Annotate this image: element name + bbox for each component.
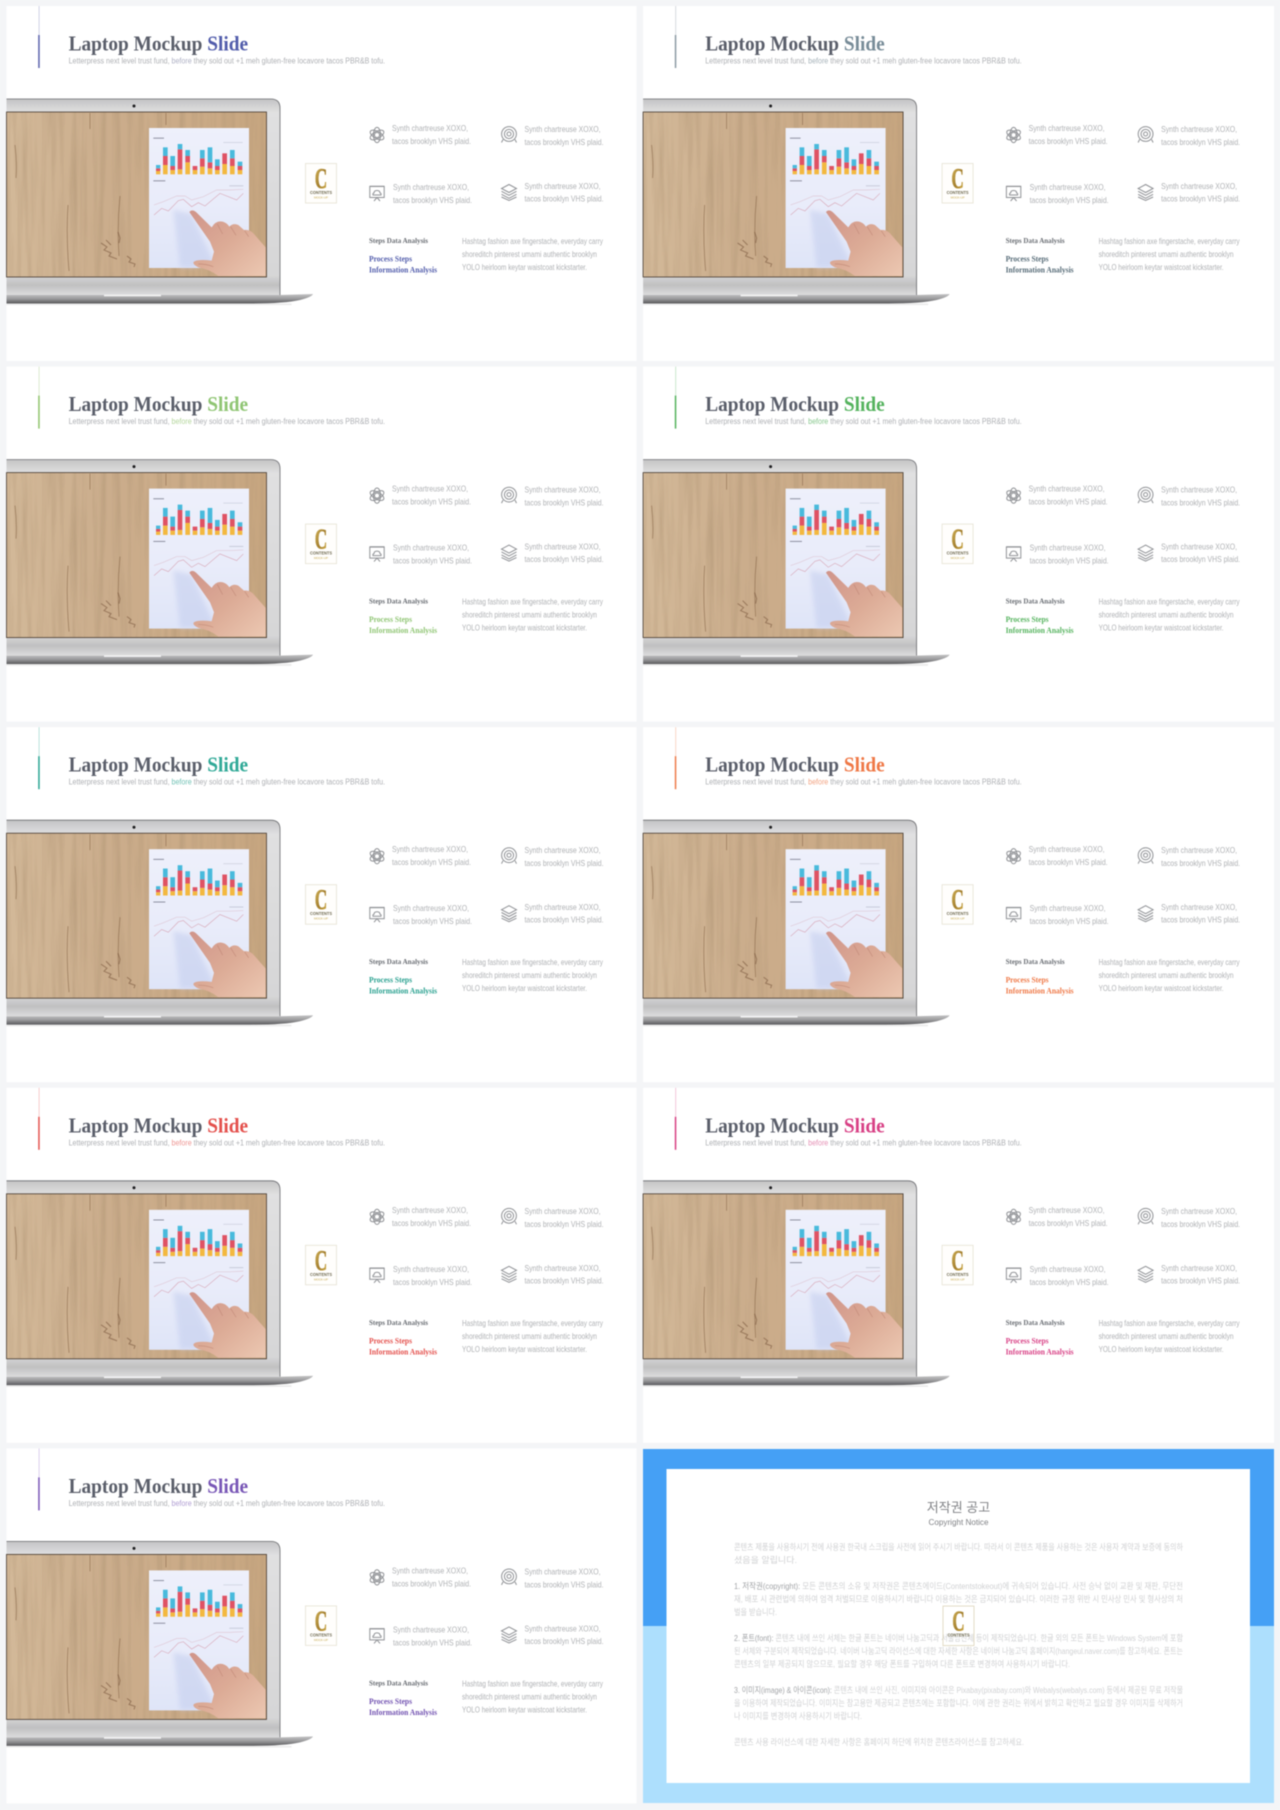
feature text 3: tacos brooklyn VHS plaid. <box>393 1277 472 1287</box>
feature text 1 <box>392 123 471 146</box>
feature text 2: Synth chartreuse XOXO, <box>1161 1206 1237 1216</box>
laptop mockup <box>6 1181 313 1387</box>
logo badge <box>306 885 336 924</box>
logo badge <box>306 164 336 203</box>
feature text 4 <box>524 181 604 204</box>
feature text 1 <box>1029 123 1108 146</box>
feature text 4: Synth chartreuse XOXO, <box>1161 1263 1237 1273</box>
feature text 2 <box>1161 124 1240 147</box>
feature text 1: Synth chartreuse XOXO, <box>392 1565 468 1575</box>
description text <box>462 1678 604 1714</box>
icon: presentation <box>370 1629 384 1643</box>
icon: target <box>1138 848 1153 864</box>
feature text 3: Synth chartreuse XOXO, <box>1030 1264 1106 1274</box>
description text: YOLO heirloom keytar waistcoat kickstarter. <box>462 983 587 993</box>
logo badge <box>942 524 973 564</box>
analysis labels: Steps Data Analysis <box>369 1678 428 1687</box>
description text: shoreditch pinterest umami authentic brooklyn <box>462 249 597 259</box>
feature text 2: tacos brooklyn VHS plaid. <box>1161 498 1240 508</box>
panel: copyright notice <box>643 1449 1274 1803</box>
feature text 2 <box>1161 485 1240 508</box>
feature text 1: Synth chartreuse XOXO, <box>1029 123 1105 133</box>
panel: slide 8 pink <box>643 1088 1274 1443</box>
feature text 2: tacos brooklyn VHS plaid. <box>1161 137 1240 147</box>
feature text 2 <box>1161 1206 1240 1229</box>
analysis labels <box>1006 236 1074 274</box>
icon: presentation <box>370 547 384 562</box>
description text: Hashtag fashion axe fingerstache, everyday carry <box>1099 957 1240 967</box>
accent line <box>38 1448 40 1510</box>
analysis labels: Information Analysis <box>369 987 437 996</box>
analysis labels: Information Analysis <box>369 1347 437 1356</box>
feature text 2: Synth chartreuse XOXO, <box>524 485 600 495</box>
panel: slide 6 orange <box>643 727 1274 1082</box>
icon: target <box>502 1569 516 1585</box>
description text: YOLO heirloom keytar waistcoat kickstarter. <box>462 623 587 633</box>
icon: atom <box>369 1570 385 1585</box>
notice subtitle: Copyright Notice <box>928 1517 989 1527</box>
feature text 4: tacos brooklyn VHS plaid. <box>1161 554 1240 564</box>
notice white card <box>666 1469 1250 1783</box>
notice title: 저작권 공고 <box>927 1500 990 1515</box>
panel: slide 5 teal <box>6 727 636 1082</box>
feature text 2: tacos brooklyn VHS plaid. <box>524 1219 604 1229</box>
feature text 1: Synth chartreuse XOXO, <box>1029 484 1105 494</box>
icon: presentation <box>370 1268 384 1283</box>
feature text 3: Synth chartreuse XOXO, <box>393 903 469 913</box>
panel: slide 4 green <box>643 367 1274 722</box>
analysis labels: Information Analysis <box>369 266 437 274</box>
feature text 3: tacos brooklyn VHS plaid. <box>393 1637 472 1647</box>
description text: YOLO heirloom keytar waistcoat kickstarter. <box>1099 1344 1224 1354</box>
feature text 1: tacos brooklyn VHS plaid. <box>1029 857 1108 867</box>
description text <box>1099 236 1240 272</box>
analysis labels: Process Steps <box>1006 1336 1049 1345</box>
analysis labels: Steps Data Analysis <box>369 1318 428 1327</box>
icon: layers <box>502 1627 516 1643</box>
description text: shoreditch pinterest umami authentic brooklyn <box>462 970 597 980</box>
description text <box>462 597 604 633</box>
feature text 3: tacos brooklyn VHS plaid. <box>393 195 472 205</box>
feature text 1 <box>392 484 471 507</box>
feature text 2: tacos brooklyn VHS plaid. <box>524 498 604 508</box>
analysis labels: Steps Data Analysis <box>1006 236 1065 245</box>
feature text 4: Synth chartreuse XOXO, <box>524 1263 600 1273</box>
feature text 3 <box>393 182 472 205</box>
description text: YOLO heirloom keytar waistcoat kickstarter. <box>462 262 587 272</box>
feature text 2: Synth chartreuse XOXO, <box>1161 845 1237 855</box>
analysis labels: Process Steps <box>369 976 412 985</box>
analysis labels <box>1006 1318 1074 1356</box>
notice footer line: 콘텐츠 사용 라이선스에 대한 자세한 사항은 홈페이지 하단에 위치한 콘텐츠라이선스를 참고하세요. <box>734 1736 1024 1747</box>
analysis labels <box>369 597 437 635</box>
feature text 1: Synth chartreuse XOXO, <box>1029 844 1105 854</box>
feature text 1 <box>392 1565 471 1588</box>
feature text 3 <box>1030 1264 1109 1287</box>
feature text 3 <box>393 1264 472 1287</box>
notice section 3: 3. 이미지(image) & 아이콘(icon): 콘텐츠 내에 쓰인 사진, 이미지와 아이콘은 Pixabay(pixabay.com)와 Webalys(webalys.com) 등에서 제공된 무료 저작물 <box>734 1684 1183 1695</box>
feature text 3 <box>393 543 472 566</box>
feature text 4 <box>524 542 604 564</box>
feature text 3 <box>1030 903 1109 926</box>
feature text 4: tacos brooklyn VHS plaid. <box>524 194 604 204</box>
feature text 3: tacos brooklyn VHS plaid. <box>1030 556 1109 566</box>
feature text 4 <box>1161 1263 1240 1285</box>
notice section 1: 재, 배포 시 관련법에 의하여 엄격 처벌되므로 이용하시기 바랍니다 이용하는 것은 금지되어 있습니다. 이러한 규정 위반 시 민사상 민사 및 형사상의 처 <box>734 1593 1183 1604</box>
feature text 2: tacos brooklyn VHS plaid. <box>524 1579 604 1589</box>
title: Laptop Mockup Slide <box>69 392 248 416</box>
feature text 3 <box>393 1624 472 1647</box>
feature text 3 <box>1030 182 1109 205</box>
logo badge <box>942 1245 973 1285</box>
feature text 3 <box>1030 543 1109 566</box>
logo badge <box>306 524 336 564</box>
icon: presentation <box>1006 186 1021 201</box>
notice section 2: 2. 폰트(font): 콘텐츠 내에 쓰인 서체는 한글 폰트는 네이버 나눔고딕과 서울남산체 등이 제작되었습니다. 한글 외의 모든 폰트는 Windows System에 포함 <box>734 1632 1183 1643</box>
title: Laptop Mockup Slide <box>705 1113 885 1137</box>
icon: layers <box>1138 184 1153 200</box>
feature text 1: Synth chartreuse XOXO, <box>392 1205 468 1215</box>
description text: shoreditch pinterest umami authentic brooklyn <box>1099 970 1234 980</box>
description text: Hashtag fashion axe fingerstache, everyday carry <box>1099 1318 1240 1328</box>
feature text 3: Synth chartreuse XOXO, <box>1030 543 1106 553</box>
icon: atom <box>369 1209 385 1224</box>
subtitle: Letterpress next level trust fund, before they sold out +1 meh gluten-free locavore tacos PBR&B tofu. <box>69 778 385 787</box>
feature text 4: tacos brooklyn VHS plaid. <box>1161 1275 1240 1285</box>
feature text 2 <box>524 845 604 868</box>
description text <box>462 236 604 272</box>
description text: shoreditch pinterest umami authentic brooklyn <box>462 1691 597 1701</box>
feature text 1: Synth chartreuse XOXO, <box>392 844 468 854</box>
analysis labels <box>1006 957 1074 996</box>
feature text 3: tacos brooklyn VHS plaid. <box>393 916 472 926</box>
accent line <box>38 727 40 789</box>
logo badge overlay: C <box>952 1607 965 1638</box>
feature text 2: Synth chartreuse XOXO, <box>524 845 600 855</box>
logo badge <box>306 1606 336 1645</box>
notice background blue <box>643 1449 1274 1803</box>
description text: shoreditch pinterest umami authentic brooklyn <box>462 610 597 620</box>
subtitle: Letterpress next level trust fund, before they sold out +1 meh gluten-free locavore tacos PBR&B tofu. <box>705 1138 1022 1147</box>
analysis labels: Steps Data Analysis <box>1006 957 1065 966</box>
feature text 2: tacos brooklyn VHS plaid. <box>524 137 604 147</box>
description text <box>1099 1318 1240 1354</box>
description text: YOLO heirloom keytar waistcoat kickstarter. <box>1099 623 1224 633</box>
icon: layers <box>1138 1266 1153 1282</box>
icon: presentation <box>1006 907 1021 922</box>
accent line <box>675 1088 676 1150</box>
subtitle: Letterpress next level trust fund, before they sold out +1 meh gluten-free locavore tacos PBR&B tofu. <box>705 417 1022 426</box>
feature text 2: tacos brooklyn VHS plaid. <box>524 858 604 868</box>
analysis labels <box>369 1318 437 1356</box>
icon: atom <box>369 849 385 864</box>
logo badge overlay <box>943 1606 974 1646</box>
feature text 3: Synth chartreuse XOXO, <box>393 1264 469 1274</box>
subtitle: Letterpress next level trust fund, before they sold out +1 meh gluten-free locavore tacos PBR&B tofu. <box>705 778 1022 787</box>
feature text 1: tacos brooklyn VHS plaid. <box>1029 136 1108 146</box>
notice intro: 콘텐츠 제품을 사용하시기 전에 사용권 한국내 스크립을 사전에 읽어 주시기 바랍니다. 따라서 이 콘텐츠 제품을 사용하는 것은 사용자 계약과 보증에 동의하 <box>734 1541 1183 1552</box>
notice section 3 <box>734 1684 1183 1721</box>
feature text 2: Synth chartreuse XOXO, <box>524 1566 600 1576</box>
icon: target <box>502 487 516 503</box>
feature text 4 <box>1161 181 1240 204</box>
analysis labels: Process Steps <box>1006 254 1049 264</box>
feature text 3: tacos brooklyn VHS plaid. <box>1030 195 1109 205</box>
feature text 4: Synth chartreuse XOXO, <box>1161 181 1237 191</box>
analysis labels: Process Steps <box>369 615 412 624</box>
notice section 1: 벌을 받습니다. <box>734 1607 777 1617</box>
notice section 3: 나 이미지를 변경하여 사용하시기 바랍니다. <box>734 1710 862 1721</box>
analysis labels: Process Steps <box>369 1697 412 1706</box>
subtitle: Letterpress next level trust fund, before they sold out +1 meh gluten-free locavore tacos PBR&B tofu. <box>69 1499 385 1508</box>
notice section 2 <box>734 1632 1183 1669</box>
description text: YOLO heirloom keytar waistcoat kickstarter. <box>1099 983 1224 993</box>
subtitle: Letterpress next level trust fund, before they sold out +1 meh gluten-free locavore tacos PBR&B tofu. <box>69 417 385 426</box>
icon: layers <box>502 1266 516 1282</box>
description text: shoreditch pinterest umami authentic brooklyn <box>462 1331 597 1341</box>
analysis labels <box>369 236 437 274</box>
logo badge <box>942 885 973 924</box>
feature text 2: Synth chartreuse XOXO, <box>524 1206 600 1216</box>
description text: YOLO heirloom keytar waistcoat kickstarter. <box>462 1704 587 1714</box>
laptop mockup <box>643 99 950 305</box>
subtitle: Letterpress next level trust fund, before they sold out +1 meh gluten-free locavore tacos PBR&B tofu. <box>69 1138 385 1147</box>
panel: slide 3 light green <box>6 367 636 722</box>
title: Laptop Mockup Slide <box>69 32 248 56</box>
feature text 2: tacos brooklyn VHS plaid. <box>1161 1219 1240 1229</box>
notice section 1 <box>734 1580 1183 1617</box>
feature text 3: tacos brooklyn VHS plaid. <box>393 556 472 566</box>
analysis labels: Information Analysis <box>1006 987 1074 996</box>
analysis labels: Steps Data Analysis <box>1006 597 1065 606</box>
feature text 3: tacos brooklyn VHS plaid. <box>1030 916 1109 926</box>
icon: target <box>502 848 516 864</box>
feature text 4 <box>1161 902 1240 925</box>
laptop mockup <box>643 460 950 666</box>
analysis labels: Process Steps <box>369 254 412 264</box>
title: Laptop Mockup Slide <box>705 753 885 777</box>
laptop mockup <box>6 820 313 1026</box>
feature text 4: Synth chartreuse XOXO, <box>524 181 600 191</box>
feature text 1 <box>1029 844 1108 867</box>
icon: atom <box>1005 488 1022 503</box>
description text: Hashtag fashion axe fingerstache, everyday carry <box>462 1318 604 1328</box>
description text: Hashtag fashion axe fingerstache, everyday carry <box>462 597 604 607</box>
icon: layers <box>502 184 516 200</box>
feature text 4: tacos brooklyn VHS plaid. <box>524 1275 604 1285</box>
feature text 1: Synth chartreuse XOXO, <box>392 123 468 133</box>
icon: layers <box>502 545 516 561</box>
feature text 2: Synth chartreuse XOXO, <box>1161 124 1237 134</box>
description text <box>462 1318 604 1354</box>
feature text 2: Synth chartreuse XOXO, <box>524 124 600 134</box>
accent line <box>38 367 40 429</box>
feature text 4 <box>524 1623 604 1646</box>
title: Laptop Mockup Slide <box>69 753 248 777</box>
feature text 4: Synth chartreuse XOXO, <box>1161 542 1237 552</box>
subtitle: Letterpress next level trust fund, before they sold out +1 meh gluten-free locavore tacos PBR&B tofu. <box>705 56 1022 66</box>
feature text 1: tacos brooklyn VHS plaid. <box>392 857 471 867</box>
feature text 4: Synth chartreuse XOXO, <box>524 902 600 912</box>
analysis labels: Steps Data Analysis <box>369 957 428 966</box>
feature text 4: Synth chartreuse XOXO, <box>1161 902 1237 912</box>
laptop mockup <box>6 1541 313 1748</box>
feature text 3: Synth chartreuse XOXO, <box>393 543 469 553</box>
logo badge overlay: CONTENTS <box>948 1633 970 1638</box>
notice section 2: 된 서체와 구분되어 제작되었습니다. 네이버 나눔고딕 라이선스에 대한 자세한 사항은 네이버 나눔고딕 홈페이지(hangeul.naver.com)를 참고하세요. 폰트는 <box>734 1645 1183 1656</box>
feature text 2 <box>1161 845 1240 868</box>
analysis labels: Process Steps <box>1006 976 1049 985</box>
panel: slide 1 indigo <box>6 6 636 361</box>
analysis labels: Process Steps <box>1006 615 1049 624</box>
feature text 3: Synth chartreuse XOXO, <box>393 1624 469 1634</box>
feature text 1: tacos brooklyn VHS plaid. <box>1029 1218 1108 1228</box>
icon: target <box>1138 487 1153 503</box>
analysis labels: Information Analysis <box>1006 266 1074 274</box>
subtitle: Letterpress next level trust fund, before they sold out +1 meh gluten-free locavore tacos PBR&B tofu. <box>69 56 385 66</box>
accent line <box>675 367 676 429</box>
icon: presentation <box>1006 547 1021 562</box>
feature text 2: Synth chartreuse XOXO, <box>1161 485 1237 495</box>
icon: atom <box>1005 127 1022 143</box>
feature text 4: tacos brooklyn VHS plaid. <box>1161 194 1240 204</box>
feature text 4: tacos brooklyn VHS plaid. <box>1161 915 1240 925</box>
analysis labels: Information Analysis <box>369 1708 437 1717</box>
feature text 1 <box>1029 1205 1108 1228</box>
description text: Hashtag fashion axe fingerstache, everyday carry <box>462 1678 604 1688</box>
icon: layers <box>1138 906 1153 922</box>
icon: presentation <box>370 907 384 922</box>
laptop mockup <box>6 460 313 666</box>
icon: target <box>502 1208 516 1224</box>
accent line <box>38 6 40 68</box>
laptop mockup <box>643 820 950 1026</box>
analysis labels: Steps Data Analysis <box>1006 1318 1065 1327</box>
feature text 1: tacos brooklyn VHS plaid. <box>392 136 471 146</box>
feature text 4 <box>524 1263 604 1285</box>
description text <box>1099 597 1240 633</box>
feature text 1: tacos brooklyn VHS plaid. <box>392 497 471 507</box>
description text: Hashtag fashion axe fingerstache, everyday carry <box>462 236 604 246</box>
icon: presentation <box>1006 1268 1021 1283</box>
description text: YOLO heirloom keytar waistcoat kickstarter. <box>462 1344 587 1354</box>
description text: shoreditch pinterest umami authentic brooklyn <box>1099 1331 1234 1341</box>
analysis labels: Process Steps <box>369 1336 412 1345</box>
feature text 4 <box>524 902 604 925</box>
title: Laptop Mockup Slide <box>69 1113 248 1137</box>
feature text 4 <box>1161 542 1240 564</box>
feature text 2: tacos brooklyn VHS plaid. <box>1161 858 1240 868</box>
feature text 1 <box>392 1205 471 1228</box>
panel: slide 2 slate <box>643 6 1274 361</box>
laptop mockup <box>643 1181 950 1387</box>
icon: atom <box>369 488 385 503</box>
icon: layers <box>502 906 516 922</box>
feature text 4: tacos brooklyn VHS plaid. <box>524 554 604 564</box>
feature text 3: Synth chartreuse XOXO, <box>393 182 469 192</box>
feature text 1: tacos brooklyn VHS plaid. <box>392 1218 471 1228</box>
analysis labels <box>369 957 437 996</box>
feature text 1 <box>1029 484 1108 507</box>
feature text 2 <box>524 485 604 508</box>
feature text 3: Synth chartreuse XOXO, <box>1030 182 1106 192</box>
icon: layers <box>1138 545 1153 561</box>
analysis labels <box>369 1678 437 1717</box>
notice intro: 셨음을 알립니다. <box>734 1555 797 1565</box>
feature text 1: Synth chartreuse XOXO, <box>392 484 468 494</box>
title: Laptop Mockup Slide <box>705 392 885 416</box>
notice section 2: 콘텐츠의 일부 제공되지 않으므로, 필요할 경우 해당 폰트를 구입하여 다른 폰트로 변경하여 사용하시기 바랍니다. <box>734 1658 1070 1669</box>
feature text 3 <box>393 903 472 926</box>
panel: slide 7 red <box>6 1088 636 1443</box>
feature text 4: Synth chartreuse XOXO, <box>524 1623 600 1633</box>
laptop mockup <box>6 99 313 305</box>
feature text 1: Synth chartreuse XOXO, <box>1029 1205 1105 1215</box>
icon: atom <box>369 127 385 143</box>
analysis labels: Information Analysis <box>1006 1347 1074 1356</box>
analysis labels: Information Analysis <box>369 626 437 635</box>
feature text 4: tacos brooklyn VHS plaid. <box>524 1636 604 1646</box>
icon: target <box>1138 1208 1153 1224</box>
accent line <box>675 6 676 68</box>
feature text 3: Synth chartreuse XOXO, <box>1030 903 1106 913</box>
feature text 1 <box>392 844 471 867</box>
description text: Hashtag fashion axe fingerstache, everyday carry <box>462 957 604 967</box>
logo badge <box>306 1245 336 1285</box>
accent line <box>38 1088 40 1150</box>
description text <box>462 957 604 993</box>
analysis labels: Steps Data Analysis <box>369 597 428 606</box>
description text: shoreditch pinterest umami authentic brooklyn <box>1099 249 1234 259</box>
description text <box>1099 957 1240 993</box>
description text: YOLO heirloom keytar waistcoat kickstarter. <box>1099 262 1224 272</box>
feature text 1: tacos brooklyn VHS plaid. <box>1029 497 1108 507</box>
icon: presentation <box>370 186 384 201</box>
icon: target <box>1138 127 1153 142</box>
feature text 2 <box>524 1566 604 1589</box>
analysis labels <box>1006 597 1074 635</box>
feature text 1: tacos brooklyn VHS plaid. <box>392 1578 471 1588</box>
description text: Hashtag fashion axe fingerstache, everyday carry <box>1099 597 1240 607</box>
feature text 2 <box>524 1206 604 1229</box>
feature text 2 <box>524 124 604 147</box>
panel: slide 9 purple <box>6 1448 636 1803</box>
title: Laptop Mockup Slide <box>69 1474 248 1498</box>
title: Laptop Mockup Slide <box>705 32 885 56</box>
icon: atom <box>1005 1209 1022 1224</box>
analysis labels: Steps Data Analysis <box>369 236 428 245</box>
icon: atom <box>1005 849 1022 864</box>
analysis labels: Information Analysis <box>1006 626 1074 635</box>
feature text 4: tacos brooklyn VHS plaid. <box>524 915 604 925</box>
accent line <box>675 727 676 789</box>
description text: shoreditch pinterest umami authentic brooklyn <box>1099 610 1234 620</box>
feature text 4: Synth chartreuse XOXO, <box>524 542 600 552</box>
notice section 1: 1. 저작권(copyright): 모든 콘텐츠의 소유 및 저작권은 콘텐츠에이드(Contentstokeout)에 귀속되어 있습니다. 사전 승낙 없이 교환 및 재판, 무단전 <box>734 1580 1183 1591</box>
description text: Hashtag fashion axe fingerstache, everyday carry <box>1099 236 1240 246</box>
logo badge <box>942 164 973 203</box>
feature text 3: tacos brooklyn VHS plaid. <box>1030 1277 1109 1287</box>
notice section 3: 을 이용하여 제작되었습니다. 이미지는 참고용만 제공되고 콘텐츠에는 포함합니다. 이에 관한 권리는 위에서 밝히고 확인하고 필요할 경우 이미지를 삭제하거 <box>734 1697 1183 1708</box>
notice intro <box>734 1541 1183 1565</box>
icon: target <box>502 127 516 142</box>
